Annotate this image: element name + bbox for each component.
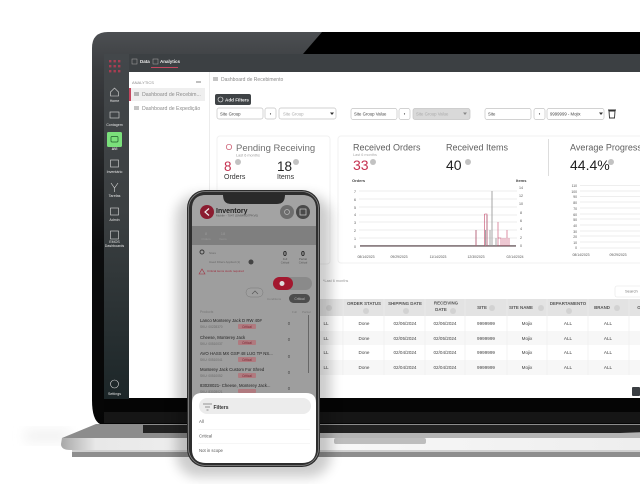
data table: 9999999 [477, 365, 495, 370]
phone: Items [219, 237, 227, 241]
phone [176, 190, 331, 477]
pagination button [632, 387, 640, 396]
filters sheet: All [199, 419, 204, 424]
chart: orders and items: 0 [354, 245, 356, 249]
chart: orders and items: 6 [520, 219, 522, 223]
phone: Mobile - 7047 (DMMMD7PKV0) [216, 214, 258, 218]
phone: 0 [283, 251, 287, 258]
filter labels: 9999999 - Mojix [550, 112, 581, 116]
chart: orders and items: 6 [354, 198, 356, 202]
data table: Mojix [522, 350, 533, 355]
sidebar: Home [110, 99, 119, 103]
product list: Partial [302, 310, 311, 314]
chart: orders and items: 4 [520, 227, 522, 231]
product list: Critical [242, 358, 252, 362]
data table: Done [359, 350, 370, 355]
chart: average progress: 40 [573, 224, 577, 228]
sidebar: Settings [108, 392, 121, 396]
data table: 02/05/2024 [434, 336, 457, 341]
card: received orders and items: Received Orders [353, 142, 421, 152]
product list: SKU: 00228370 [200, 325, 223, 329]
data table: 02/06/2024 [434, 321, 457, 326]
chart: average progress: 50 [573, 218, 577, 222]
chart: orders and items: 0 [520, 244, 522, 248]
filter labels: Site Group Value [416, 112, 449, 116]
chart: orders and items: 2 [354, 229, 356, 233]
sidebar: AVI [112, 147, 117, 151]
phone: Inventory [216, 208, 248, 215]
chart: orders and items [352, 178, 527, 259]
data table: Done [359, 321, 370, 326]
page title: Dashboard de Recebimento [221, 77, 283, 83]
filters sheet: Not in scope [199, 448, 223, 453]
card: pending receiving: 18 [277, 159, 292, 174]
chart: average progress: 60 [573, 213, 577, 217]
chart: orders and items: 12/30/2023 [468, 255, 485, 259]
filter labels: • [270, 112, 272, 116]
data table: 9999999 [477, 321, 495, 326]
chart: average progress: 110 [572, 184, 577, 188]
data table: 9999999 [477, 350, 495, 355]
product list: 0 [288, 354, 291, 359]
data table: 02/04/2024 [394, 365, 417, 370]
data table: 02/06/2024 [394, 321, 417, 326]
phone: 8 [205, 231, 208, 236]
data table: LL [323, 336, 329, 341]
product list: SKU: 83028021 [200, 390, 223, 394]
data table: ALL [564, 365, 573, 370]
data table: SHIPPING DATE [388, 301, 422, 306]
product list: 0 [288, 321, 291, 326]
data table: 02/04/2024 [434, 350, 457, 355]
data table: DEPARTAMENTO [550, 301, 587, 306]
product list: 0 [288, 370, 291, 375]
chart: average progress: 20 [573, 235, 577, 239]
chart: average progress: 90 [573, 195, 577, 199]
analytics panel: ANALYTICS [132, 80, 154, 85]
notch [223, 193, 285, 204]
card: pending receiving: Orders [224, 174, 246, 181]
chart: orders and items: 02/14/2024 [507, 255, 524, 259]
data table: 02/04/2024 [394, 350, 417, 355]
nav icons [110, 88, 119, 388]
product list: Products [200, 310, 214, 314]
phone: Conditions [267, 297, 282, 301]
table shadow [25, 430, 70, 442]
data table: SITE NAME [509, 305, 533, 310]
analytics panel [129, 72, 210, 192]
data table: ALL [564, 336, 573, 341]
chart: orders and items: Items [516, 178, 527, 183]
filters sheet [192, 393, 316, 463]
chart: average progress: 10 [573, 241, 577, 245]
chart: average progress [571, 184, 640, 257]
product list: SKU: 00510052 [200, 374, 223, 378]
card: pending receiving [217, 136, 330, 264]
sidebar [104, 54, 129, 399]
product list: Lanco Monterey Jack D RW 40# [200, 318, 262, 323]
data table: 02/05/2024 [394, 336, 417, 341]
product list: SKU: 00510037 [200, 342, 223, 346]
phone: Used Filters Applied (1) [209, 260, 240, 264]
top bar: Analytics [160, 59, 181, 64]
chart: orders and items: 3 [354, 221, 356, 225]
last months note: *Last 6 months [323, 279, 348, 283]
sidebar: Admin [109, 218, 120, 222]
laptop base [62, 424, 640, 438]
data table: ALL [604, 336, 613, 341]
card: received orders and items [338, 136, 640, 263]
product list: Monterey Jack Custom For Shred [200, 367, 265, 372]
product list: 83028021- Cheese, Monterey Jack... [200, 383, 270, 388]
product list: AVO HASS MX GSP 48 LUG TP NS... [200, 351, 273, 356]
card: received orders and items: 40 [446, 157, 462, 173]
product list: 0 [288, 337, 291, 342]
sidebar: Inventário [107, 170, 122, 174]
card: received orders and items: 44.4% [570, 157, 610, 173]
phone: Critical items stock required [207, 269, 244, 273]
data table: LL [323, 365, 329, 370]
summary band [192, 226, 316, 245]
data table: ALL [604, 321, 613, 326]
analytics panel: Dashboard de Expedição [142, 106, 200, 112]
chart: average progress: 80 [573, 201, 577, 205]
card: pending receiving: 8 [224, 159, 232, 174]
data table: ALL [564, 321, 573, 326]
chart: orders and items: 4 [354, 213, 356, 217]
chart: orders and items: 7 [354, 190, 356, 194]
data table: 9999999 [477, 336, 495, 341]
filter labels: • [539, 112, 541, 116]
app header [192, 195, 316, 226]
add filters button [215, 94, 251, 105]
data table: RECEIVING [434, 300, 459, 306]
data table: ALL [564, 350, 573, 355]
data table: 02/04/2024 [434, 365, 457, 370]
chart: average progress: 09/29/2023 [610, 253, 627, 257]
chart: orders and items: 12 [519, 194, 523, 198]
chart: orders and items: 2 [520, 236, 522, 240]
top bar [104, 54, 640, 72]
filters sheet: Critical [199, 434, 212, 438]
data table: Mojix [522, 321, 533, 326]
product list: SKU: 00510041 [200, 358, 223, 362]
phone: 0 [301, 251, 305, 258]
chart: orders and items: 14 [519, 186, 523, 190]
product list: 0 [288, 386, 291, 391]
product list: Cheese, Monterey Jack [200, 335, 246, 340]
phone body [187, 190, 320, 467]
chart: orders and items: 1 [354, 237, 356, 241]
data table: LL [323, 321, 329, 326]
product list: Critical [242, 325, 252, 329]
filter row [217, 108, 604, 120]
product list: Full [292, 310, 297, 314]
phone: Partial [299, 257, 307, 261]
add filters button: Add Filters [225, 98, 249, 102]
data table [320, 299, 640, 375]
card: received orders and items: Average Progress [570, 142, 640, 152]
card: received orders and items: Received Items [446, 142, 509, 152]
filter labels: Site Group [283, 112, 304, 116]
filter labels: Site Group Value [354, 112, 387, 116]
sidebar: EMOS [109, 240, 120, 244]
collapse control [246, 288, 263, 297]
product list: Critical [242, 374, 252, 378]
data table: LL [323, 350, 329, 355]
chart: orders and items: 5 [354, 206, 356, 210]
product list [200, 310, 311, 394]
data table: Done [359, 336, 370, 341]
product list: Critical [242, 341, 252, 345]
card: pending receiving: Pending Receiving [236, 143, 315, 154]
app content [129, 72, 640, 398]
search box [615, 286, 640, 297]
phone: Orders [201, 237, 211, 241]
store details [200, 250, 204, 254]
card: received orders and items: Last 6 months [353, 153, 377, 157]
chart: orders and items: Orders [352, 178, 366, 183]
chart: orders and items: 09/29/2023 [391, 255, 408, 259]
dropdown carets [330, 112, 603, 115]
data table: ALL [604, 350, 613, 355]
filter labels: • [404, 112, 406, 116]
data table: DATE [435, 307, 447, 312]
top bar: Data [140, 59, 150, 64]
logo [109, 60, 120, 72]
data table: Done [359, 365, 370, 370]
data table: Mojix [522, 336, 533, 341]
phone: Store [209, 251, 217, 255]
analytics panel: Dashboard de Recebim... [142, 92, 201, 98]
sidebar: Tarefas [109, 194, 121, 198]
data table: Mojix [522, 365, 533, 370]
phone: Critical [294, 297, 305, 301]
filter labels: Site Group [220, 112, 241, 116]
chart: average progress: 08/14/2023 [573, 253, 590, 257]
card: pending receiving: Items [277, 174, 295, 181]
phone: Critical [299, 260, 308, 264]
card: received orders and items: 33 [353, 157, 369, 173]
data table: SITE [477, 305, 487, 310]
phone: 18 [221, 231, 226, 236]
chart: average progress: 30 [573, 230, 577, 234]
filters sheet: Filters [214, 405, 229, 411]
data table: BRAND [594, 305, 610, 310]
chart: orders and items: 11/14/2023 [430, 255, 446, 259]
laptop lid [92, 32, 640, 424]
sidebar: Contagem [106, 123, 123, 127]
data table: ALL [604, 365, 613, 370]
card: pending receiving: Last 6 months [236, 154, 260, 158]
chart: average progress: 100 [571, 190, 577, 194]
chart: orders and items: 10 [519, 202, 523, 206]
trash icon [608, 110, 616, 118]
data table: ORDER STATUS [347, 301, 381, 306]
phone: Full [283, 257, 288, 261]
chart: average progress: 0 [575, 246, 577, 250]
toggle [273, 277, 312, 290]
active nav item [107, 132, 122, 147]
phone: Critical [281, 260, 290, 264]
chart: orders and items: 8 [520, 211, 522, 215]
filter labels [220, 112, 581, 116]
search box: Search [625, 288, 638, 294]
filter labels: Site [488, 112, 496, 116]
chart: orders and items: 08/14/2023 [358, 255, 375, 259]
critical pill [289, 294, 310, 303]
chart: average progress: 70 [573, 207, 577, 211]
phone shadow [176, 195, 331, 477]
sidebar: Dashboards [105, 244, 124, 248]
